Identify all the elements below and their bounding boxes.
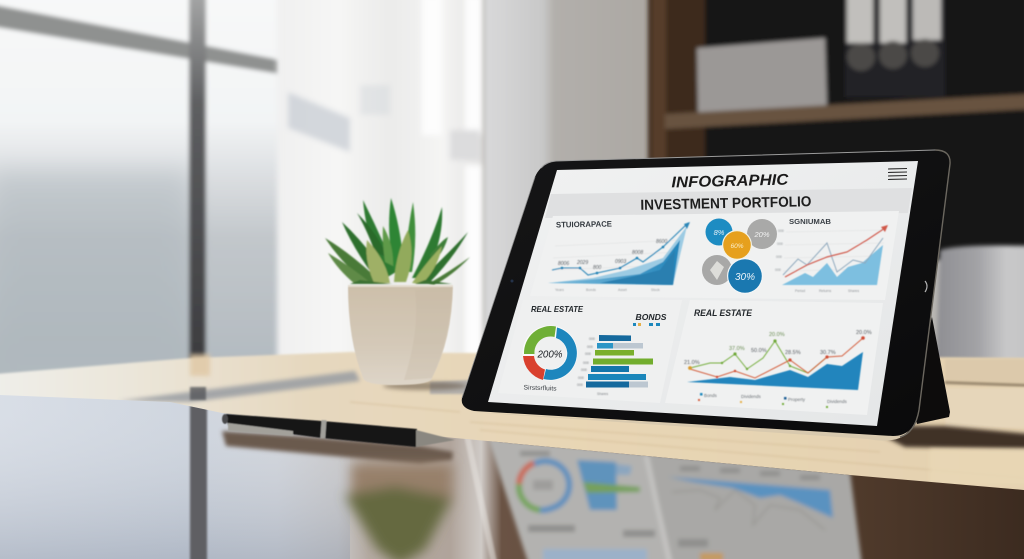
area chart: left: Years xyxy=(555,288,564,292)
plant xyxy=(325,198,470,385)
curtain xyxy=(277,0,483,370)
area chart: right: Returns xyxy=(819,289,832,293)
heading: bonds: BONDS xyxy=(636,312,667,322)
line chart: 28.5% xyxy=(785,350,801,356)
bubble chart: 30% xyxy=(735,272,755,283)
chair xyxy=(936,246,1024,362)
area chart: left: 800 xyxy=(593,265,602,271)
bubble chart xyxy=(702,218,777,294)
ceramic pot xyxy=(348,285,453,385)
bezel xyxy=(462,150,950,436)
bar chart: 000 xyxy=(583,361,589,365)
panel: real estate and bonds xyxy=(498,300,682,403)
reflected text smears xyxy=(520,451,820,547)
heading band xyxy=(545,188,912,218)
bar chart: 000 xyxy=(589,337,595,341)
area chart: right: Period xyxy=(795,289,805,293)
donut chart: 200% xyxy=(537,348,562,360)
bar chart: 000 xyxy=(577,383,583,387)
panel: top dashboard xyxy=(530,211,899,300)
kickstand xyxy=(910,317,950,424)
bubble chart: 20% xyxy=(753,230,770,239)
area chart: right: 000 xyxy=(777,242,783,246)
area chart: left: 2029 xyxy=(576,260,588,266)
donut chart xyxy=(523,326,577,380)
line chart: 20.0% xyxy=(856,330,872,336)
wood grain xyxy=(350,402,1024,478)
panel: real estate line chart xyxy=(665,300,883,415)
area chart: right: 000 xyxy=(776,255,782,259)
area chart: left: 0903 xyxy=(615,259,626,265)
wall xyxy=(485,0,650,365)
pen reflection xyxy=(222,431,453,464)
area chart: left: 8008 xyxy=(632,250,643,256)
tablet xyxy=(462,150,950,441)
bar chart xyxy=(577,335,653,396)
camera xyxy=(510,280,514,282)
bar chart: 000 xyxy=(581,368,587,372)
subtitle: INVESTMENT PORTFOLIO xyxy=(640,194,812,214)
area chart: left: Stock xyxy=(651,288,660,292)
legend: Dividends xyxy=(827,399,848,404)
legend: bonds xyxy=(633,323,660,326)
line chart: 37.0% xyxy=(729,346,745,352)
line chart: 20.0% xyxy=(769,332,785,338)
bubble chart: 60% xyxy=(730,243,744,250)
bar chart: 000 xyxy=(578,376,584,380)
heading: left chart: STUIORAPACE xyxy=(556,220,613,229)
donut caption: Sirstsrfluits xyxy=(523,384,557,393)
pot shadow xyxy=(383,382,467,390)
window mullion reflection xyxy=(190,405,207,559)
screen xyxy=(488,161,918,426)
title: INFOGRAPHIC xyxy=(671,172,789,191)
bar chart: 000 xyxy=(587,345,593,349)
plant reflection xyxy=(345,464,452,559)
reflected bars xyxy=(577,460,617,510)
line chart xyxy=(684,330,872,390)
legend xyxy=(698,393,848,408)
area chart: left: 8006 xyxy=(558,261,569,267)
legend: Bonds xyxy=(704,393,718,398)
right table edge xyxy=(945,359,1024,383)
legend: Property xyxy=(788,397,806,402)
icon: menu xyxy=(888,168,907,180)
bookshelf xyxy=(648,0,1024,260)
tablet reflection xyxy=(488,438,862,559)
bubble chart: 8% xyxy=(714,228,725,237)
heading: real estate: REAL ESTATE xyxy=(531,304,583,314)
line chart: 21.0% xyxy=(684,360,700,366)
heading: right chart: SGNIUMAB xyxy=(789,217,832,226)
reflected donut xyxy=(519,461,569,510)
tablet edge xyxy=(470,410,918,441)
glossy reflective surface xyxy=(0,380,1024,559)
line chart: 50.0% xyxy=(751,348,767,354)
heading: real estate 2: REAL ESTATE xyxy=(694,308,753,318)
area chart: left: 8600 xyxy=(656,239,667,245)
area chart: right: 000 xyxy=(775,268,781,272)
area chart: left xyxy=(548,222,690,292)
pen xyxy=(222,414,455,447)
table surface xyxy=(0,352,1024,500)
bar chart: 000 xyxy=(585,352,591,356)
tablet shadow xyxy=(880,426,1024,449)
reflected area chart xyxy=(668,477,833,518)
line chart: 30.7% xyxy=(820,350,836,356)
area chart: left: Bonds xyxy=(586,288,596,292)
legend: Dividends xyxy=(741,394,762,399)
area chart: right: Shares xyxy=(848,289,859,293)
bar chart: Shares xyxy=(597,392,608,396)
area chart: right xyxy=(775,225,888,293)
succulent leaves xyxy=(325,198,470,285)
window with city view xyxy=(0,0,290,390)
home button xyxy=(925,281,927,292)
area chart: left: Asset xyxy=(618,288,627,292)
area chart: right: 000 xyxy=(778,229,784,233)
